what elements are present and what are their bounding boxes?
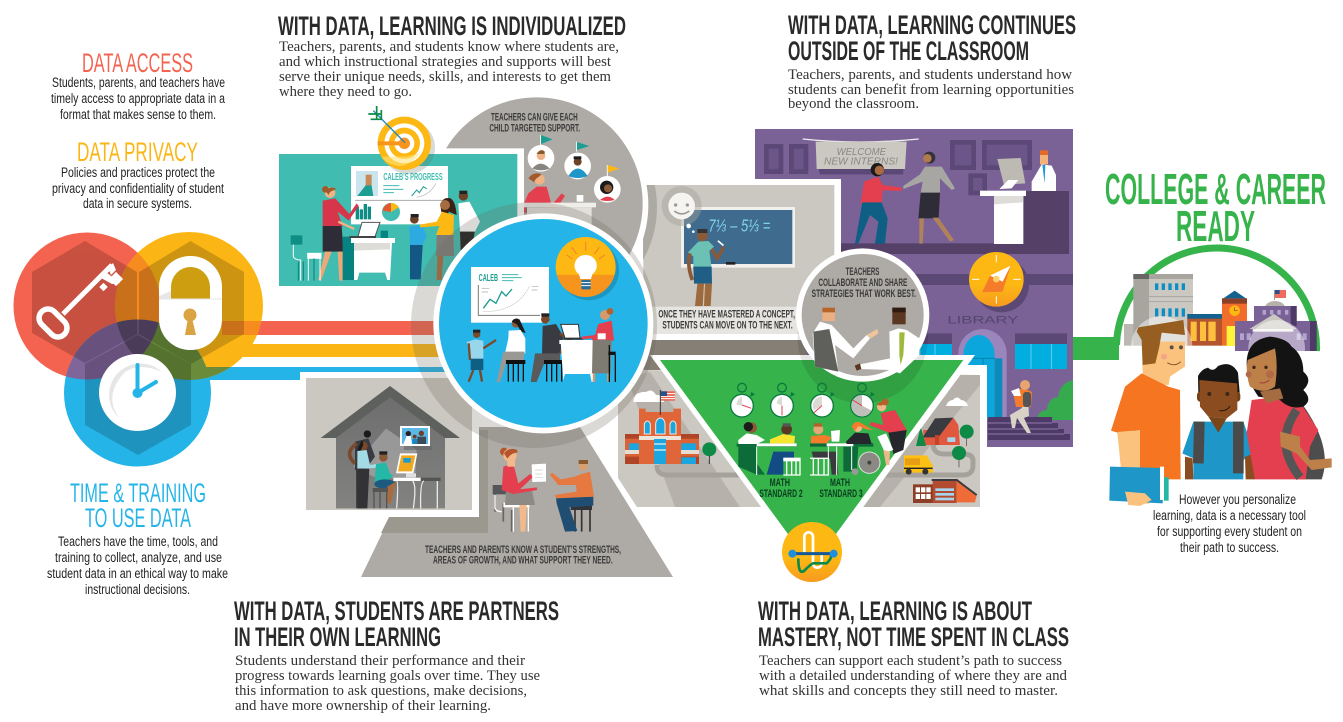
icon: target with arrow xyxy=(368,106,435,174)
figure: woman on stool xyxy=(497,319,526,382)
text block: data privacy: privacy and confidentiality of student xyxy=(52,181,224,196)
scene: college and career xyxy=(1109,274,1332,506)
caption: TEACHERS CAN GIVE EACH xyxy=(491,112,578,124)
labels: math standards: MATH xyxy=(770,477,790,489)
white frame xyxy=(273,148,524,292)
stripes: data flows xyxy=(205,321,445,380)
heading: college and career ready: READY xyxy=(1176,202,1255,251)
chart board xyxy=(471,267,549,323)
figure: teacher leaning xyxy=(877,402,886,411)
labels: math standards: MATH xyxy=(830,477,850,489)
chalkboard xyxy=(681,207,795,268)
caption: COLLABORATE AND SHARE xyxy=(818,277,908,289)
text block: data access: DATA ACCESS xyxy=(82,48,193,78)
panel: targeted support circle and teal classroom xyxy=(273,95,648,315)
text block: closing message: for supporting every student on xyxy=(1157,524,1302,539)
text block: closing message: their path to success. xyxy=(1180,540,1279,555)
family figures xyxy=(350,430,396,508)
buildings xyxy=(1124,274,1317,351)
text block: data privacy xyxy=(52,137,224,211)
chair xyxy=(291,235,321,281)
second floor band xyxy=(841,274,1073,285)
school bus xyxy=(904,455,933,475)
text block: data access xyxy=(51,48,225,122)
heading and text: learning is individualized: serve their unique needs, skills, and interests to get them xyxy=(279,69,611,85)
heading and text: learning continues outside classroom xyxy=(788,10,1076,112)
text block: data access: format that makes sense to them. xyxy=(60,107,216,122)
hexagons xyxy=(32,241,244,455)
text block: time and training: TO USE DATA xyxy=(85,503,191,533)
heading and text: learning is about mastery: WITH DATA, LEARNING IS ABOUT xyxy=(758,596,1032,626)
text block: data privacy: DATA PRIVACY xyxy=(77,137,198,167)
figure: mother xyxy=(420,198,457,280)
school building xyxy=(625,390,716,464)
chalkboard: 7⅓ – 5⅓ = xyxy=(708,216,770,236)
steps xyxy=(988,417,1073,443)
text block: closing message: However you personalize xyxy=(1179,492,1296,507)
caption: TEACHERS AND PARENTS KNOW A STUDENT’S STRENGTHS, xyxy=(425,544,621,556)
caption: STRATEGIES THAT WORK BEST. xyxy=(812,288,916,300)
connector: green arc to career xyxy=(1073,248,1317,360)
heading and text: learning continues outside classroom: Teachers, parents, and students understand how xyxy=(788,67,1072,83)
windows xyxy=(903,333,1067,369)
figure: teacher in red xyxy=(318,186,359,281)
caption xyxy=(658,309,795,332)
text block: data access: timely access to appropriate data in a xyxy=(51,91,225,106)
icon: compass xyxy=(969,252,1029,312)
figure: young man xyxy=(1109,316,1192,506)
student portraits with flags xyxy=(528,135,621,203)
heading and text: students are partners: Students understand their performance and their xyxy=(235,653,525,669)
heading and text: learning continues outside classroom: beyond the classroom. xyxy=(788,96,919,112)
figure: teacher right xyxy=(855,308,919,373)
text block: time and training: training to collect, analyze, and use xyxy=(55,550,222,565)
text block: time and training: instructional decisions. xyxy=(85,582,190,597)
caption: ONCE THEY HAVE MASTERED A CONCEPT, xyxy=(658,309,795,321)
heading and text: learning is about mastery: Teachers can support each student’s path to success xyxy=(759,653,1062,669)
heading and text: learning continues outside classroom: OUTSIDE OF THE CLASSROOM xyxy=(788,36,1029,66)
text block: data access: Students, parents, and teachers have xyxy=(52,75,225,90)
picture on wall xyxy=(400,426,432,450)
balcony floor and desk xyxy=(841,191,1069,254)
display board: CALEB’S PROGRESS xyxy=(383,172,443,183)
panel: mastered a concept xyxy=(630,179,841,370)
panel: central team circle xyxy=(411,202,657,448)
heading: college and career ready xyxy=(1105,165,1326,251)
heading and text: students are partners: progress towards learning goals over time. They use xyxy=(235,668,540,684)
figure: student at board xyxy=(688,229,724,306)
heading and text: learning is about mastery: with a detailed understanding of where they are and xyxy=(759,668,1067,684)
banner xyxy=(803,139,919,174)
text block: data privacy: data in secure systems. xyxy=(83,196,192,211)
door xyxy=(958,329,1007,418)
stairs and student xyxy=(988,380,1073,443)
heading and text: learning is individualized: Teachers, parents, and students know where students are, xyxy=(279,39,619,55)
labels: math standards: STANDARD 3 xyxy=(819,488,863,500)
caption xyxy=(489,112,580,135)
display board xyxy=(351,166,448,224)
icon: smiley thought bubble xyxy=(662,186,702,233)
banner: NEW INTERNS! xyxy=(824,156,898,167)
venn circles xyxy=(14,232,282,466)
figures: students at tables xyxy=(737,399,907,475)
heading and text: learning is individualized: WITH DATA, LEARNING IS INDIVIDUALIZED xyxy=(278,11,626,41)
text block: time and training xyxy=(47,478,228,597)
figure: receptionist xyxy=(997,150,1056,191)
heading and text: learning is individualized: where they need to go. xyxy=(279,84,412,100)
figure: parent seated xyxy=(550,460,594,532)
icon: clock xyxy=(99,354,176,431)
heading and text: learning is about mastery: MASTERY, NOT TIME SPENT IN CLASS xyxy=(758,622,1069,652)
heading and text: learning is about mastery: what skills and concepts they still need to master. xyxy=(759,683,1058,699)
figure: teacher left xyxy=(813,308,878,372)
caption: AREAS OF GROWTH, AND WHAT SUPPORT THEY NEED. xyxy=(433,555,613,567)
text block: closing message xyxy=(1153,492,1306,555)
text block: time and training: Teachers have the time, tools, and xyxy=(58,534,218,549)
label: library: LIBRARY xyxy=(947,315,1019,327)
desk and teacher xyxy=(559,308,616,382)
panel: school and neighborhood xyxy=(612,365,987,513)
icon: stopwatches xyxy=(731,383,875,417)
heading and text: students are partners: WITH DATA, STUDENTS ARE PARTNERS xyxy=(234,596,559,626)
figure: father xyxy=(458,191,480,250)
chart board: CALEB xyxy=(479,273,498,284)
panel: parent teacher trapezoid xyxy=(361,427,673,577)
figure: boy xyxy=(1182,364,1255,479)
cloud xyxy=(634,391,664,402)
figure: woman greeting xyxy=(903,152,955,244)
panel: home scene xyxy=(300,372,479,517)
upper windows xyxy=(766,142,1030,193)
caption xyxy=(425,544,621,567)
heading and text: students are partners xyxy=(234,596,559,714)
heading and text: students are partners: and have more ownership of their learning. xyxy=(235,698,491,714)
labels: math standards: STANDARD 2 xyxy=(759,488,803,500)
bush xyxy=(1036,380,1073,420)
figure: girl xyxy=(1246,320,1332,479)
panel: mastery triangle xyxy=(650,355,975,577)
neighborhood: bus and houses xyxy=(904,418,977,503)
caption xyxy=(812,266,916,300)
mastery triangle content xyxy=(731,383,907,582)
icon: key xyxy=(35,263,123,341)
brick building xyxy=(913,478,977,503)
heading and text: learning is individualized: and which instructional strategies and supports will best xyxy=(279,54,612,70)
teacher at podium xyxy=(524,173,596,227)
panel: collaborate circle xyxy=(796,248,929,403)
icon: path badge xyxy=(782,522,842,582)
icon: light bulb xyxy=(556,237,619,300)
text block: time and training: TIME & TRAINING xyxy=(70,478,206,508)
caption: STUDENTS CAN MOVE ON TO THE NEXT. xyxy=(662,320,793,332)
heading and text: learning continues outside classroom: WITH DATA, LEARNING CONTINUES xyxy=(788,10,1076,40)
heading and text: learning is about mastery xyxy=(758,596,1069,699)
caption: TEACHERS xyxy=(846,266,880,278)
heading and text: students are partners: IN THEIR OWN LEARNING xyxy=(234,622,441,652)
figure: child xyxy=(409,214,427,279)
panel: library building xyxy=(755,129,1073,447)
caption: CHILD TARGETED SUPPORT. xyxy=(489,123,580,135)
computer desk xyxy=(393,453,441,508)
figure: teacher with document xyxy=(493,448,546,532)
heading and text: students are partners: this information to ask questions, make decisions, xyxy=(235,683,527,699)
heading and text: learning is individualized xyxy=(278,11,626,100)
heading and text: learning continues outside classroom: students can benefit from learning opportunities xyxy=(788,82,1074,98)
desk with laptop xyxy=(343,222,395,280)
house xyxy=(321,386,460,508)
teal panel xyxy=(279,154,517,286)
text block: data privacy: Policies and practices protect the xyxy=(61,165,215,180)
icon: padlock xyxy=(159,256,222,350)
figure: student on stairs xyxy=(1010,380,1032,433)
text block: time and training: student data in an ethical way to make xyxy=(47,566,228,581)
circle shadow on math panel xyxy=(643,185,657,260)
figure: child xyxy=(467,330,496,382)
banner: WELCOME xyxy=(837,147,886,158)
labels: math standards xyxy=(759,477,863,500)
figure: intern in red xyxy=(855,163,902,244)
figure: man on stool xyxy=(531,313,570,382)
road xyxy=(657,443,973,475)
